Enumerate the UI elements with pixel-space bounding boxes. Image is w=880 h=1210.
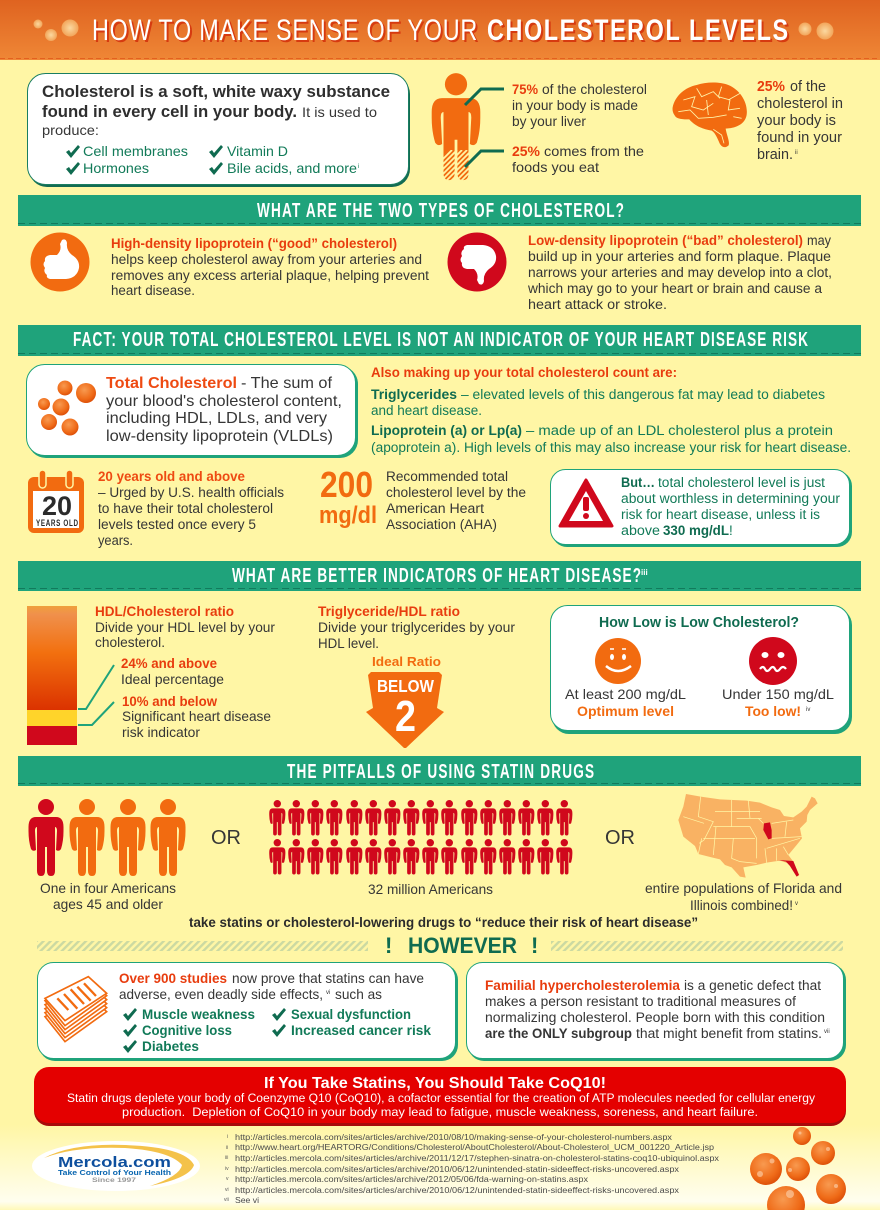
panel: how low is low cholesterol: iv [806, 707, 810, 713]
panel: what is cholesterol: Hormones [83, 160, 149, 176]
logo: Mercola.com: Since 1997 [92, 1177, 137, 1184]
text: recommended: American Heart [386, 501, 484, 516]
panel: how low is low cholesterol: How Low is Low Cholesterol? [599, 615, 799, 631]
logo: Mercola.com: Take Control of Your Health [58, 1170, 171, 1177]
text: LDL: heart attack or stroke. [528, 297, 667, 312]
panel: warning: about worthless in determining your [621, 491, 841, 506]
text: also making up: and heart disease. [371, 403, 482, 418]
text: also making up: – elevated levels of this dangerous fat may lead to diabetes [461, 387, 825, 402]
panel: total cholesterol: Total Cholesterol [106, 375, 237, 392]
heading: pitfalls: THE PITFALLS OF USING STATIN DRUGS [287, 760, 594, 783]
panel: warning: ! [729, 523, 733, 538]
text: liver and food: comes from the [544, 143, 644, 159]
text: LDL: may [807, 233, 831, 248]
heading: fact: FACT: YOUR TOTAL CHOLESTEROL LEVEL IS NOT AN INDICATOR OF YOUR HEART DISEASE RISK [73, 328, 809, 351]
title: CHOLESTEROL LEVELS [487, 13, 788, 47]
icon: calendar: YEARS OLD [36, 518, 78, 528]
text: brain: brain. [757, 146, 793, 163]
panel: side effects: such as [335, 986, 382, 1002]
text: brain [757, 78, 843, 163]
icon: decorative cholesterol balls [750, 1127, 846, 1210]
heading: however: ! [531, 933, 538, 958]
text: florida and illinois: Illinois combined! [690, 897, 793, 913]
panel: side effects: adverse, even deadly side effects, [119, 986, 323, 1002]
panel: CoQ10 callout [34, 1067, 846, 1126]
text: LDL: narrows your arteries and may develop into a clot, [528, 265, 832, 280]
panel: familial hypercholesterolemia: are the ONLY subgroup [485, 1026, 632, 1041]
references: v [226, 1176, 229, 1182]
text: one in four [40, 880, 176, 912]
chart: HDL ratio bar [27, 606, 114, 745]
text: liver and food: by your liver [512, 113, 586, 129]
panel: side effects [38, 962, 458, 1061]
text: Triglyceride/HDL ratio [318, 603, 515, 669]
panel: side effects: Cognitive loss [142, 1023, 232, 1038]
panel: how low is low cholesterol: At least 200 mg/dL [565, 686, 686, 702]
heading: pitfalls [18, 756, 861, 786]
references: http://articles.mercola.com/sites/articles/archive/2010/06/12/unintended-statin-sideeffect-risks-uncovered.aspx [235, 1164, 680, 1174]
icon: below 2 arrow [366, 672, 444, 748]
panel: familial hypercholesterolemia: vii [824, 1029, 830, 1035]
text: Triglyceride/HDL ratio: Triglyceride/HDL ratio [318, 603, 460, 619]
text: Triglyceride/HDL ratio: HDL level. [318, 635, 379, 651]
text: HDL: helps keep cholesterol away from your arteries and [111, 252, 422, 267]
references: i [227, 1134, 228, 1140]
title: HOW TO MAKE SENSE OF YOUR [94, 15, 479, 49]
panel: CoQ10 callout: production. Depletion of CoQ10 in your body may lead to fatigue, muscle weakness, soreness, and heart failure. [122, 1105, 758, 1119]
text: florida and illinois: v [795, 901, 798, 907]
icon: below 2 arrow: 2 [395, 692, 416, 741]
references: ii [226, 1145, 228, 1151]
text: HDL: High-density lipoprotein (“good” cholesterol) [111, 236, 397, 251]
text: one in four: ages 45 and older [53, 896, 163, 912]
text: HDL/Cholesterol ratio: Divide your HDL level by your [95, 619, 275, 635]
text: brain: 25% [757, 78, 785, 95]
panel: total cholesterol: - The sum of [241, 375, 333, 392]
text: brain: your body is [757, 112, 836, 129]
panel: side effects: Over 900 studies [119, 970, 227, 986]
text: liver and food [512, 81, 647, 175]
panel: what is cholesterol: Vitamin D [227, 143, 288, 159]
label: or: OR [211, 827, 241, 849]
text: brain: ii [795, 150, 798, 156]
text: HDL/Cholesterol ratio: 10% and below [122, 693, 217, 709]
panel: what is cholesterol: produce: [42, 122, 99, 138]
text: liver and food: 25% [512, 143, 541, 159]
panel: what is cholesterol: Bile acids, and more [227, 160, 357, 176]
references: vi [225, 1187, 229, 1193]
text: also making up: Also making up your total cholesterol count are: [371, 365, 677, 380]
references: http://articles.mercola.com/sites/articles/archive/2010/06/12/unintended-statin-sideeffect-risks-uncovered.aspx [235, 1185, 680, 1195]
text: LDL: Low-density lipoprotein (“bad” cholesterol) [528, 233, 803, 248]
panel: how low is low cholesterol: Optimum level [577, 703, 674, 719]
text: one in four: One in four Americans [40, 880, 176, 896]
icon: smile face [595, 638, 641, 684]
map: USA with Florida and Illinois [678, 794, 818, 878]
text: florida and illinois: entire populations of Florida and [645, 880, 842, 896]
panel: side effects: now prove that statins can have [232, 970, 424, 986]
heading: however: ! [385, 933, 392, 958]
panel: how low is low cholesterol [550, 606, 852, 734]
text: brain: found in your [757, 129, 842, 146]
text: recommended: cholesterol level by the [386, 485, 526, 500]
text: LDL [527, 233, 832, 312]
text: liver and food: 75% [512, 81, 539, 97]
panel: side effects: Diabetes [142, 1039, 199, 1054]
text: also making up: (apoprotein a). High levels of this may also increase your risk for heart disease. [371, 440, 851, 455]
icon: warning triangle [560, 480, 612, 526]
panel: how low is low cholesterol: Under 150 mg/dL [722, 686, 834, 702]
panel: CoQ10 callout: If You Take Statins, You Should Take CoQ10! [264, 1075, 606, 1092]
text: HDL/Cholesterol ratio: HDL/Cholesterol ratio [95, 603, 234, 619]
heading: two types [18, 195, 861, 226]
text: recommended: Association (AHA) [386, 517, 497, 532]
text: also making up: – made up of an LDL cholesterol plus a protein [526, 423, 833, 438]
panel: familial hypercholesterolemia: that might benefit from statins. [636, 1026, 822, 1041]
panel: side effects: Sexual dysfunction [291, 1007, 411, 1022]
references: http://articles.mercola.com/sites/articles/archive/2012/05/06/fda-warning-on-statins.aspx [235, 1174, 589, 1184]
text: 20 years old: to have their total cholesterol [98, 501, 273, 516]
text: LDL: which may go to your heart or brain and cause a [527, 281, 822, 296]
panel: familial hypercholesterolemia: normalizing cholesterol. People born with this condition [485, 1010, 825, 1025]
text: liver and food: in your body is made [512, 97, 638, 113]
title: HOW TO MAKE SENSE OF YOUR [92, 13, 477, 47]
panel: CoQ10 callout: Statin drugs deplete your body of Coenzyme Q10 (CoQ10), a cofactor essential for the creation of ATP molecules needed for cellular energy [67, 1091, 816, 1105]
heading: fact [18, 325, 861, 356]
panel: what is cholesterol: found in every cell in your body. [42, 102, 297, 121]
text: 20 years old [98, 469, 284, 548]
text: liver and food: foods you eat [512, 159, 599, 175]
icon: stack of studies [45, 977, 107, 1042]
title: CHOLESTEROL LEVELS [489, 15, 790, 49]
panel: what is cholesterol: Cell membranes [83, 143, 188, 159]
text: also making up [371, 365, 851, 455]
text: Triglyceride/HDL ratio: Divide your triglycerides by your [318, 619, 515, 635]
text: brain: of the [790, 78, 826, 95]
panel: what is cholesterol: i [358, 164, 359, 170]
panel: warning: above [621, 523, 660, 538]
references: http://articles.mercola.com/sites/articles/archive/2010/08/10/making-sense-of-your-cholesterol-numbers.aspx [235, 1132, 673, 1142]
panel: side effects: vi [326, 990, 330, 996]
text: HDL: removes any excess arterial plaque, helping prevent [111, 268, 429, 283]
pictogram: one in four [28, 799, 186, 876]
text: HDL [111, 236, 429, 298]
heading: better indicators [18, 561, 861, 591]
text: liver and food: of the cholesterol [542, 81, 647, 97]
references [224, 1132, 720, 1205]
logo: Mercola.com [32, 1141, 200, 1191]
references: http://www.heart.org/HEARTORG/Conditions/Cholesterol/AboutCholesterol/About-Cholesterol_UCM_001220_Article.jsp [235, 1142, 714, 1152]
text: also making up: Triglycerides [371, 387, 457, 402]
icon: sad face [749, 637, 797, 685]
stat: 200 mg/dl: 200 [320, 464, 373, 505]
heading: however [37, 933, 843, 958]
references: iii [225, 1155, 228, 1161]
panel: familial hypercholesterolemia: makes a person resistant to traditional measures of [485, 994, 796, 1009]
text: 20 years old: 20 years old and above [98, 469, 245, 484]
stat: 200 mg/dl [319, 464, 377, 529]
panel: total cholesterol: including HDL, LDLs, and very [106, 410, 327, 427]
text: also making up: Lipoprotein (a) or Lp(a) [371, 423, 522, 438]
pictogram: 32 million [269, 800, 572, 875]
title [92, 13, 790, 49]
text: HDL/Cholesterol ratio: Significant heart disease [122, 708, 271, 724]
text: HDL/Cholesterol ratio: cholesterol. [95, 634, 165, 650]
text: brain: cholesterol in [757, 95, 843, 112]
panel: total cholesterol: your blood's cholesterol content, [106, 393, 342, 410]
panel: what is cholesterol: It is used to [302, 104, 377, 120]
panel: side effects: Muscle weakness [142, 1007, 255, 1022]
text: florida and illinois [645, 880, 842, 913]
heading: two types: WHAT ARE THE TWO TYPES OF CHOLESTEROL? [257, 199, 624, 222]
references: See vi [235, 1195, 259, 1205]
text: Triglyceride/HDL ratio: Ideal Ratio [372, 654, 441, 669]
text: recommended: Recommended total [386, 469, 508, 484]
icon: below 2 arrow: BELOW [377, 676, 434, 696]
text: HDL/Cholesterol ratio: 24% and above [121, 655, 217, 671]
references: iv [225, 1166, 229, 1172]
label: or: OR [605, 827, 635, 849]
panel: total cholesterol: low-density lipoprotein (VLDLs) [106, 428, 333, 445]
icon: thumbs down [448, 232, 506, 292]
text: HDL/Cholesterol ratio [95, 603, 275, 740]
text: LDL: build up in your arteries and form plaque. Plaque [528, 249, 831, 264]
heading: better indicators: iii [641, 568, 648, 577]
panel: familial hypercholesterolemia: is a genetic defect that [684, 978, 821, 993]
icon: cholesterol particles [38, 380, 96, 436]
panel: familial hypercholesterolemia: Familial hypercholesterolemia [485, 978, 680, 993]
heading: however: HOWEVER [408, 933, 517, 958]
text: 32 million: 32 million Americans [368, 881, 493, 897]
text: HDL/Cholesterol ratio: Ideal percentage [121, 671, 224, 687]
icon: brain [673, 82, 747, 147]
header banner [0, 0, 880, 60]
text: take statins: take statins or cholesterol-lowering drugs to “reduce their risk of heart disease” [189, 915, 698, 930]
panel: warning: total cholesterol level is just [658, 475, 825, 490]
panel: warning: 330 mg/dL [663, 523, 729, 538]
panel: side effects: Increased cancer risk [291, 1023, 431, 1038]
panel: familial hypercholesterolemia [466, 962, 846, 1061]
panel: warning: But… [621, 475, 655, 490]
panel: warning [550, 470, 852, 547]
panel: total cholesterol [26, 364, 358, 458]
heading: better indicators: WHAT ARE BETTER INDICATORS OF HEART DISEASE? [232, 564, 641, 587]
icon: calendar [28, 470, 84, 533]
references: http://articles.mercola.com/sites/articles/archive/2011/12/17/stephen-sinatra-on-cholesterol-statins-coq10-ubiquinol.aspx [235, 1153, 720, 1163]
text: HDL: heart disease. [111, 283, 195, 298]
text: 20 years old: – Urged by U.S. health officials [98, 485, 284, 500]
text: HDL/Cholesterol ratio: risk indicator [122, 724, 200, 740]
references: vii [224, 1197, 229, 1203]
stat: 200 mg/dl: mg/dl [319, 502, 377, 529]
panel: what is cholesterol: Cholesterol is a soft, white waxy substance [42, 82, 390, 101]
panel: warning: risk for heart disease, unless it is [621, 507, 820, 522]
text: 20 years old: years. [98, 533, 133, 548]
icon: thumbs up [30, 232, 90, 292]
logo: Mercola.com: Mercola.com [58, 1155, 171, 1171]
text: 20 years old: levels tested once every 5 [98, 517, 256, 532]
panel: what is cholesterol [28, 74, 410, 187]
icon: calendar: 20 [42, 491, 72, 521]
footer background [0, 1125, 880, 1210]
icon: body with liver and food callouts [432, 73, 504, 180]
panel: how low is low cholesterol: Too low! [745, 703, 801, 719]
text: recommended [386, 469, 526, 532]
